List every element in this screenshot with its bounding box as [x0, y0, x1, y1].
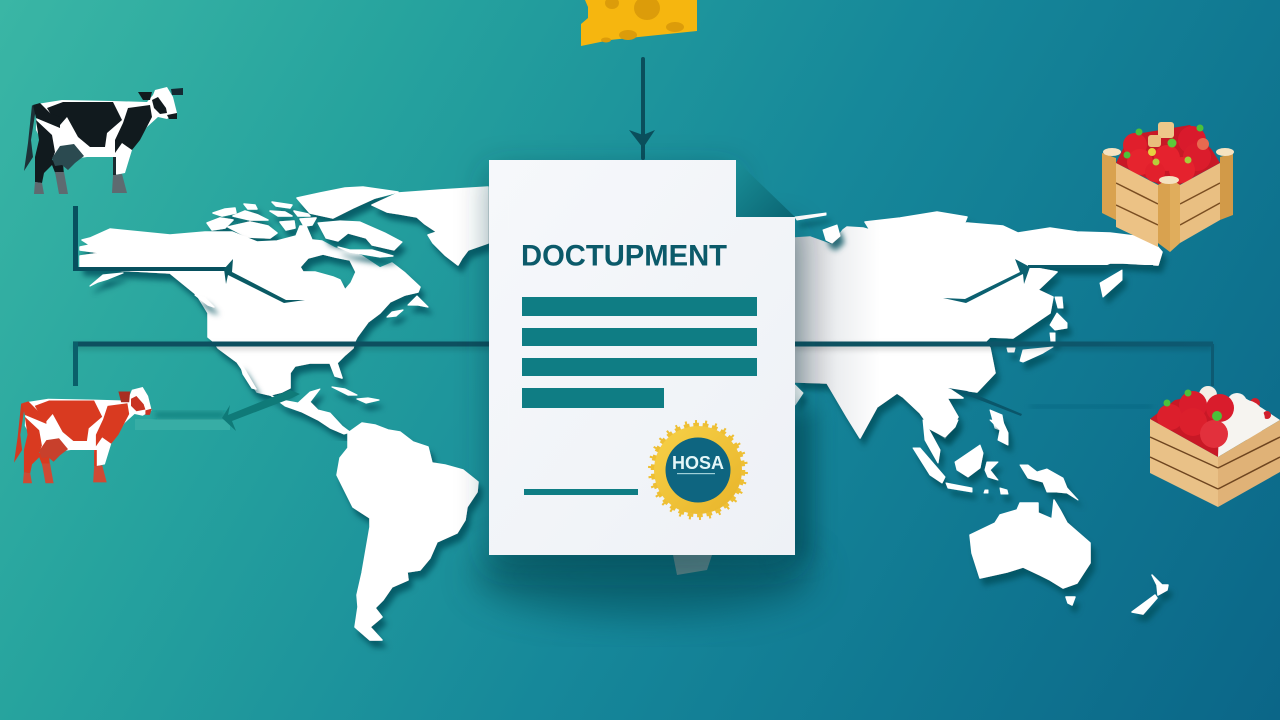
fruit pile	[1150, 386, 1280, 457]
arrow from cheese to document	[629, 57, 655, 160]
map: Asian islands	[795, 213, 1122, 432]
document folded corner	[736, 160, 795, 217]
map: Africa tip below document	[672, 550, 713, 575]
arrow from North America to black cow	[73, 206, 305, 303]
horizontal connector across map	[73, 342, 1213, 346]
connector lines and arrows	[73, 57, 1214, 431]
map: South America	[337, 423, 478, 640]
signature line	[524, 489, 638, 495]
document title: DOCTUPMENT	[521, 240, 727, 272]
right side shadow of document	[780, 410, 814, 560]
ground shadow beneath document	[475, 535, 815, 615]
lower crate of red fruit	[1150, 386, 1280, 507]
map: Eurasia	[795, 212, 1162, 438]
map: Southeast Asia	[913, 420, 1078, 500]
map: Central America	[270, 389, 350, 434]
map: Canadian and Caribbean islands	[90, 221, 428, 403]
map: Australia and New Zealand	[970, 500, 1168, 614]
gold seal badge: HOSA	[672, 453, 724, 473]
crate left face	[1150, 419, 1218, 507]
map: North America	[80, 226, 420, 395]
crate left planks	[1116, 163, 1158, 247]
crate right face	[1218, 420, 1280, 507]
gold seal badge	[650, 422, 746, 518]
right drop line to lower crate	[1211, 344, 1214, 386]
world map	[80, 187, 1168, 640]
black and white cow	[24, 87, 183, 194]
crate posts	[1102, 148, 1234, 252]
crate seams	[1116, 183, 1220, 225]
left drop line to red cow	[73, 342, 78, 386]
arrow from Asia to upper crate	[943, 259, 1153, 303]
cheese wedge	[581, 0, 697, 46]
document text bars	[522, 297, 757, 408]
arrow from Central America toward red cow	[135, 390, 300, 431]
arrow from Southeast Asia to lower crate	[948, 388, 1152, 416]
upper crate of red fruit	[1102, 122, 1234, 252]
red and white cow	[14, 387, 152, 483]
crate seams	[1150, 437, 1280, 489]
document	[489, 160, 795, 555]
crate right planks	[1180, 163, 1220, 243]
map: Greenland and Arctic	[207, 187, 488, 265]
document sheet	[489, 160, 795, 555]
fruit pile	[1116, 122, 1220, 190]
